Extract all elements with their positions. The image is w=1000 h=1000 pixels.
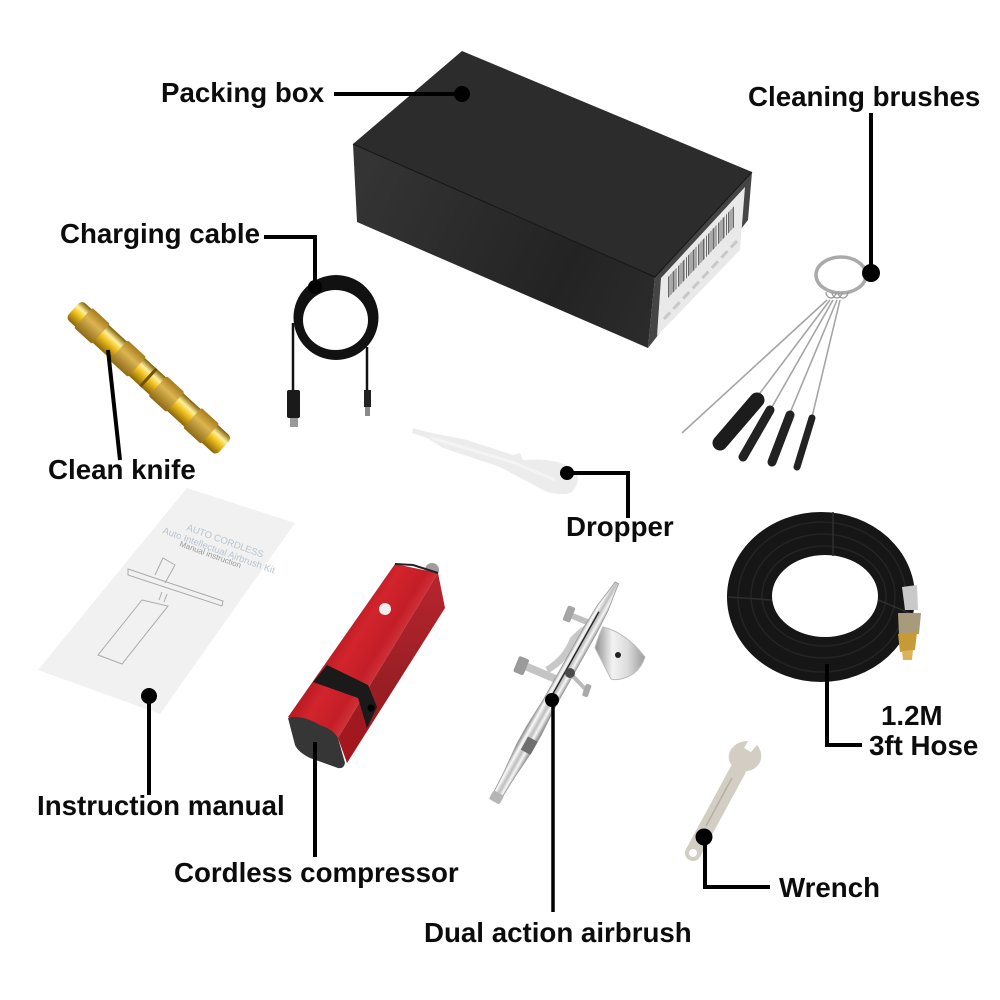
black band bbox=[313, 665, 377, 728]
handle window bbox=[521, 736, 538, 755]
callout: wrench bbox=[696, 828, 880, 903]
callout: cordless compressor: Cordless compressor bbox=[174, 857, 459, 888]
callout: instruction manual: Instruction manual bbox=[37, 790, 285, 821]
instruction manual bbox=[38, 488, 295, 714]
packing box bbox=[353, 51, 752, 348]
callout: wrench: Wrench bbox=[779, 872, 880, 903]
callout: dropper bbox=[560, 466, 674, 542]
callout: hose: 1.2M bbox=[881, 700, 943, 731]
callout: charging cable: Charging cable bbox=[60, 218, 260, 249]
dropper bbox=[412, 428, 578, 494]
dual action airbrush bbox=[487, 579, 645, 806]
callout: charging cable bbox=[60, 218, 322, 294]
callout: cleaning brushes: Cleaning brushes bbox=[748, 81, 980, 112]
callout: packing box bbox=[161, 77, 470, 108]
callout: dual action airbrush bbox=[424, 693, 692, 948]
callout: clean knife: Clean knife bbox=[48, 454, 196, 485]
callout: packing box: Packing box bbox=[161, 77, 325, 108]
callout: cleaning brushes bbox=[748, 81, 980, 282]
manual heading text: Auto Intellectual Airbrush Kit bbox=[161, 525, 277, 577]
manual heading text: Manual instruction bbox=[178, 539, 242, 570]
callout: hose: 3ft Hose bbox=[869, 730, 978, 761]
air valve bbox=[570, 673, 588, 692]
hose bbox=[727, 512, 921, 682]
callout: dual action airbrush: Dual action airbrush bbox=[424, 917, 692, 948]
cordless compressor bbox=[288, 563, 445, 768]
callout: dropper: Dropper bbox=[566, 511, 674, 542]
manual heading text: AUTO CORDLESS bbox=[185, 522, 265, 561]
callout: instruction manual bbox=[37, 688, 285, 821]
clean knife bbox=[64, 299, 233, 457]
wrench bbox=[689, 741, 761, 857]
barcode label bbox=[657, 187, 745, 336]
end cap bbox=[288, 717, 345, 768]
barrel bbox=[487, 579, 624, 806]
callout: clean knife bbox=[48, 350, 196, 485]
callout: hose bbox=[827, 664, 978, 761]
manual illustration bbox=[98, 558, 223, 664]
charging cable bbox=[287, 275, 378, 427]
cleaning brushes bbox=[682, 257, 866, 467]
trigger and needle arm bbox=[547, 623, 595, 670]
paint cup bbox=[595, 627, 645, 680]
